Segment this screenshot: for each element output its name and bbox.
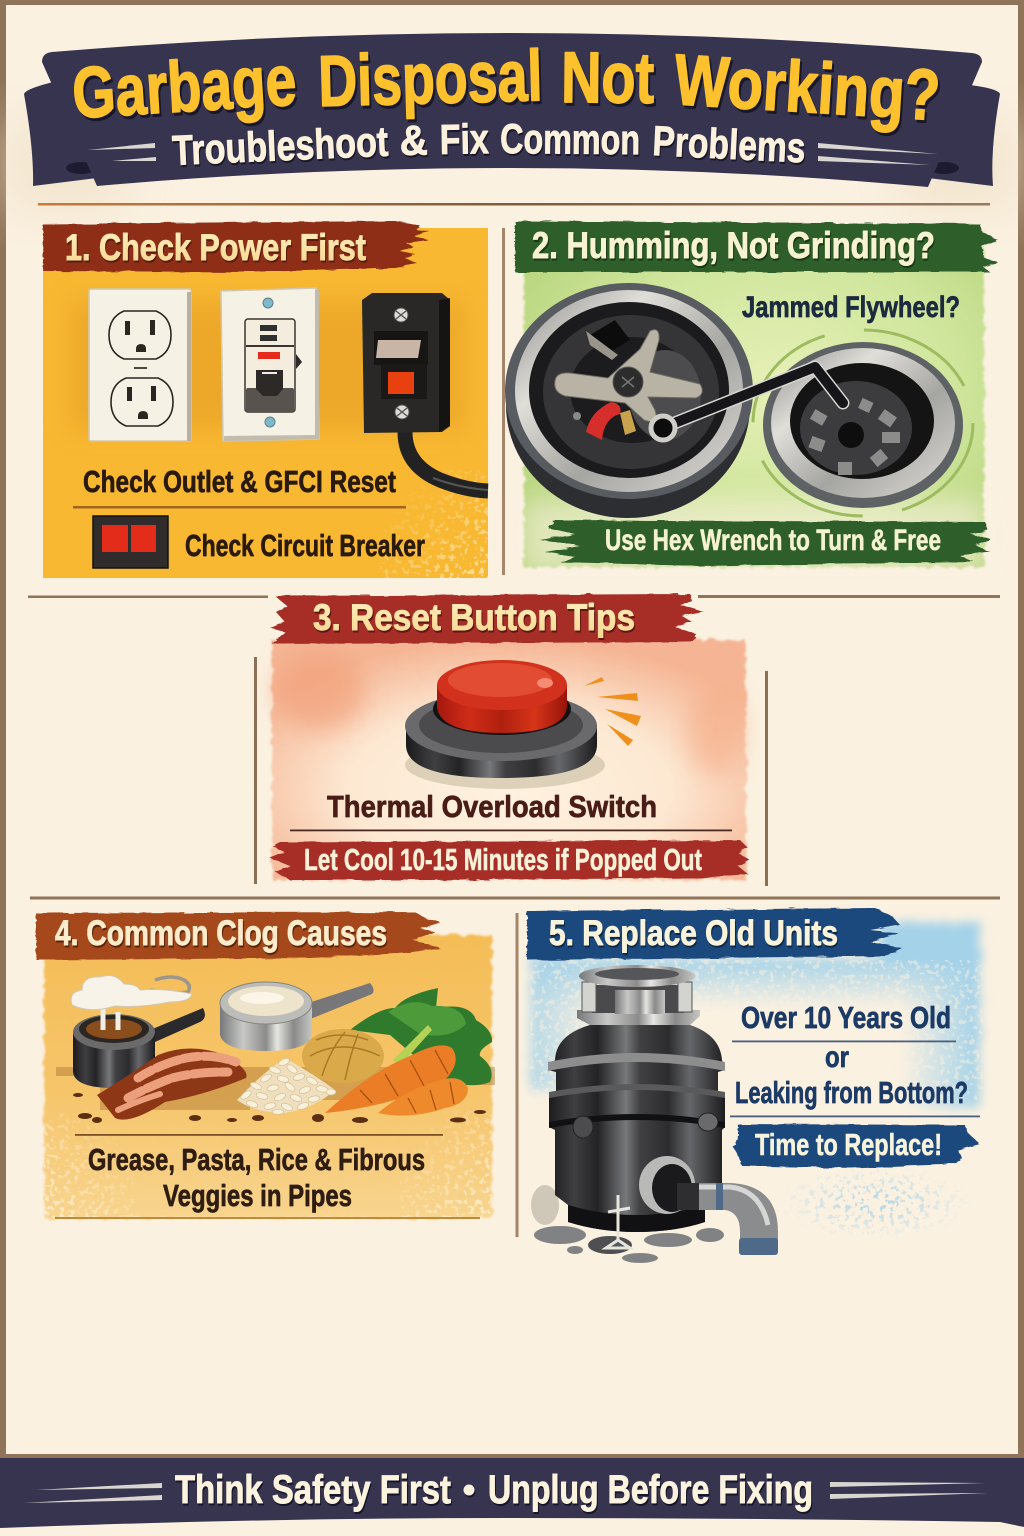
divider 2: [28, 596, 268, 598]
icon: GFCI outlet: [221, 288, 319, 441]
icon: click rays: [584, 677, 641, 746]
caption: clog causes: Grease, Pasta, Rice & Fibrous: [88, 1142, 425, 1177]
strip: cool down tip: [270, 840, 750, 880]
counter surface: [56, 1067, 495, 1110]
vertical divider 1: [502, 228, 505, 575]
strip: cool down tip: Let Cool 10-15 Minutes if Popped Out: [304, 842, 702, 877]
collar: [577, 1010, 700, 1025]
footer text: Think Safety First: [175, 1468, 451, 1512]
icon: circuit breaker: [93, 516, 168, 568]
icon: leafy greens: [350, 988, 492, 1085]
panel 3 background: [272, 640, 746, 880]
label: thermal overload: Thermal Overload Switch: [327, 789, 657, 824]
heading 1: 1. Check Power First: [65, 227, 366, 268]
icon: hex wrench: [651, 367, 843, 440]
large flywheel: [505, 283, 753, 518]
subtitle text: Problems: [652, 117, 807, 171]
side rule left of panel 3: [254, 657, 257, 884]
footer banner: [0, 1458, 1024, 1528]
text: age and leak criteria: or: [825, 1041, 849, 1074]
panel 5 background: [530, 922, 980, 1108]
icon: grease pot and steam: [71, 976, 205, 1088]
heading 3: 3. Reset Button Tips: [313, 597, 635, 638]
panel 1: check power: [43, 221, 488, 578]
icon: carrots: [325, 1045, 468, 1116]
footer text: Unplug Before Fixing: [488, 1468, 813, 1512]
top divider: [38, 203, 990, 206]
small drain wheel: [753, 330, 973, 516]
panel 5: replace old units: [527, 908, 983, 1263]
jam debris: [586, 402, 621, 440]
puddles: [531, 1185, 724, 1263]
icon: rice pile: [237, 1057, 336, 1114]
icon: garbage disposal unit: [548, 965, 725, 1248]
leak drip: [606, 1195, 630, 1248]
icon: power switch and cord: [362, 293, 488, 491]
panel 2 background: [524, 232, 984, 567]
subtitle text: &: [399, 117, 428, 164]
title text: Garbage: [70, 40, 299, 134]
title banner: [24, 33, 1000, 187]
icon: duplex outlet: [89, 289, 191, 441]
subtitle text: Common: [500, 115, 640, 163]
panel 4 background: [44, 935, 492, 1218]
panel 2: humming: [505, 221, 998, 572]
divider 3: [30, 896, 1000, 900]
heading 2: 2. Humming, Not Grinding?: [532, 225, 935, 266]
title text: [70, 36, 942, 136]
footer text: [175, 1468, 813, 1512]
panel 1 background: [43, 228, 488, 578]
icon: red reset button: [405, 660, 605, 789]
strip: time to replace: Time to Replace!: [755, 1127, 942, 1162]
title text: Working?: [672, 40, 942, 136]
ribbon tails: [24, 80, 1000, 186]
ribbon body: [42, 33, 982, 187]
strip: time to replace: [733, 1124, 980, 1168]
vertical divider 2: [516, 913, 518, 1237]
heading 3: [270, 594, 704, 644]
label: circuit breaker: Check Circuit Breaker: [185, 528, 425, 563]
heading 5: 5. Replace Old Units: [549, 914, 838, 953]
heading 5: [527, 908, 902, 960]
icon: bacon: [97, 1048, 247, 1120]
speed lines: [88, 143, 938, 165]
title text: Not: [561, 38, 655, 119]
text: age and leak criteria: Over 10 Years Old: [741, 1000, 951, 1035]
caption: clog causes: [88, 1142, 425, 1213]
panel 3: reset button: [270, 594, 750, 880]
subtitle text: Troubleshoot: [171, 118, 389, 174]
side rule right of panel 3: [765, 671, 768, 886]
subtitle text: Fix: [439, 115, 490, 163]
icon: food crumbs: [73, 1093, 486, 1123]
caption: clog causes: Veggies in Pipes: [163, 1178, 352, 1213]
strip: hex wrench tip: [540, 520, 992, 566]
icon: drain pipe: [677, 1183, 778, 1255]
title text: Disposal: [317, 36, 543, 122]
blades: [555, 330, 702, 422]
subtitle text: [171, 115, 807, 174]
heading 4: 4. Common Clog Causes: [55, 914, 387, 953]
text: age and leak criteria: [730, 1000, 980, 1117]
panel 4: clog causes: [36, 912, 495, 1219]
icon: pasta pan: [220, 982, 374, 1051]
icon: onion: [302, 1029, 384, 1083]
label: jammed flywheel: Jammed Flywheel?: [742, 291, 960, 324]
footer speed lines: [24, 1482, 988, 1503]
label: outlet reset: Check Outlet & GFCI Reset: [83, 464, 396, 499]
outlet port: [639, 1156, 695, 1214]
